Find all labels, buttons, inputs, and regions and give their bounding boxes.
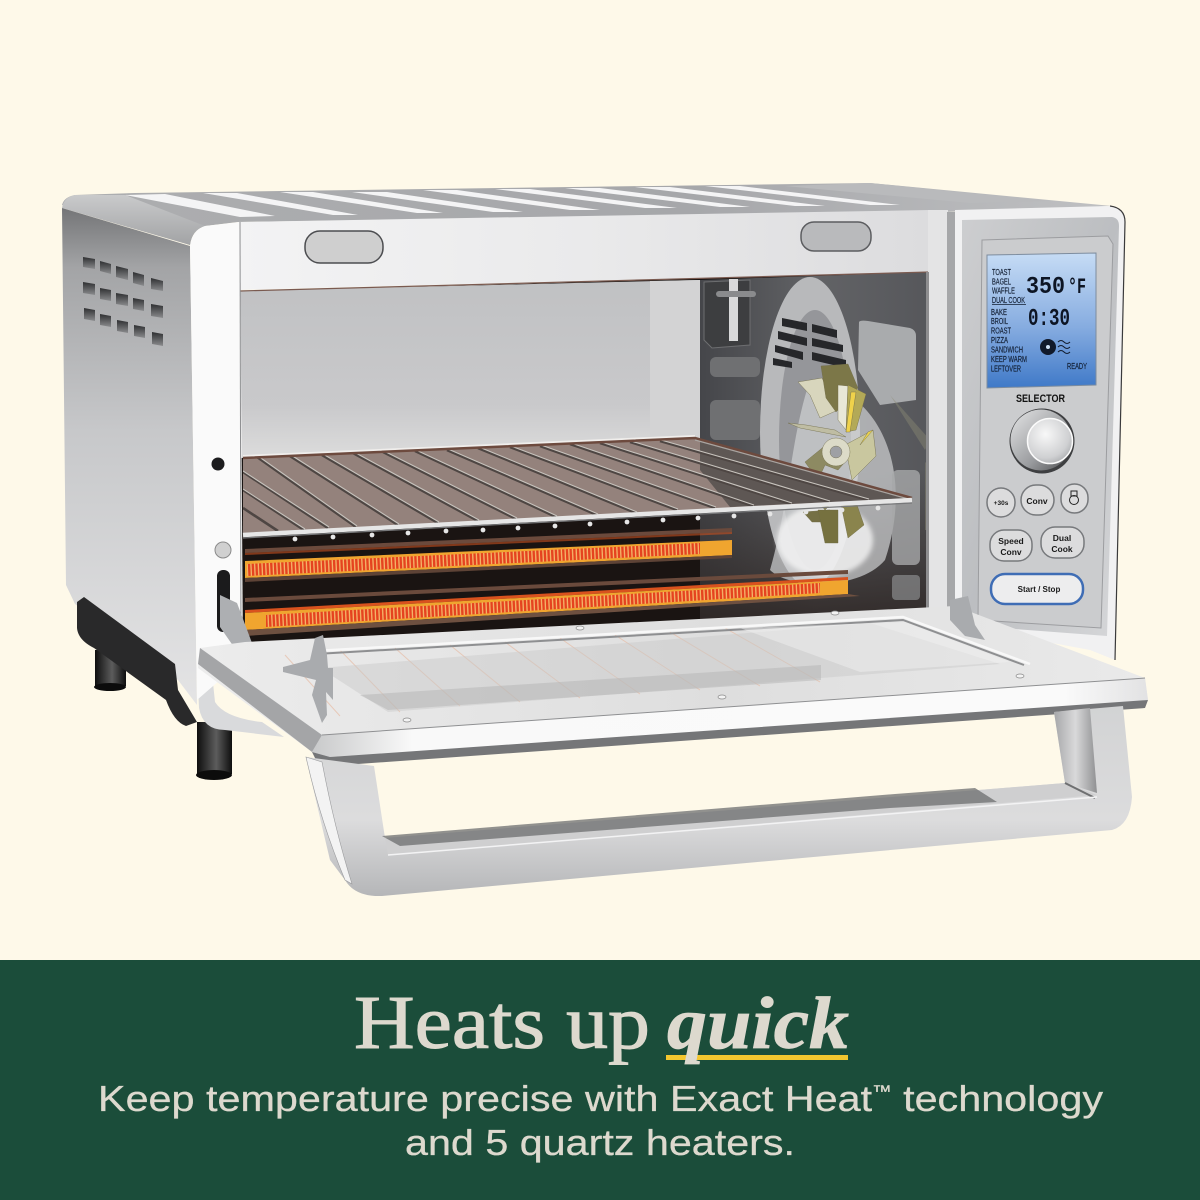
left side wall [62, 208, 197, 705]
upper quartz heater [245, 528, 732, 582]
bulb icon [1070, 491, 1078, 504]
right wall [700, 272, 930, 622]
shoulder of left side [62, 195, 205, 245]
lower base bracket [198, 683, 284, 737]
right strut inner face [1054, 708, 1097, 793]
LCD display: BROIL [991, 317, 1008, 326]
button labels: +30s [994, 500, 1009, 507]
LCD display [987, 253, 1096, 388]
LCD display: READY [1067, 362, 1087, 371]
door handle [306, 706, 1132, 896]
back wall [240, 280, 700, 458]
buttons [987, 484, 1088, 604]
LCD display: BAKE [991, 308, 1007, 317]
toaster oven [62, 183, 1148, 896]
heading: quick [667, 983, 849, 1065]
LCD display: °F [1068, 275, 1086, 300]
green caption band [0, 960, 1200, 1200]
front frame left post [190, 222, 252, 700]
lower quartz heater [245, 570, 860, 636]
door front edge [312, 678, 1148, 757]
subheading: and 5 quartz heaters. [405, 1122, 795, 1163]
front foot [196, 722, 232, 780]
background [0, 0, 1200, 960]
LCD display: ROAST [991, 326, 1011, 336]
subheading: ™ [872, 1082, 892, 1101]
LCD display: LEFTOVER [991, 364, 1021, 374]
yellow underline [666, 1055, 848, 1060]
ghost fan reflection [890, 362, 972, 530]
convection fan housing [760, 277, 920, 600]
selector knob [1010, 408, 1074, 474]
oven top [62, 183, 1112, 245]
LCD display: DUAL COOK [992, 296, 1025, 305]
selector label: SELECTOR [1016, 393, 1065, 405]
LCD display: SANDWICH [991, 346, 1023, 354]
rear foot [94, 650, 126, 691]
subheading: technology [892, 1078, 1103, 1119]
LCD display: BAGEL [992, 278, 1011, 286]
subheading: Keep temperature precise with Exact Heat [98, 1078, 772, 1119]
button labels: Conv [1000, 547, 1022, 557]
fan blades [788, 364, 876, 543]
LCD display: 350 [1026, 274, 1065, 301]
side vents [83, 257, 163, 346]
LCD display: TOAST [992, 268, 1011, 277]
LCD display: PIZZA [991, 336, 1008, 345]
open door [198, 596, 1148, 766]
door hinges [283, 596, 985, 723]
door glass [320, 623, 1000, 712]
fan symbol [1040, 339, 1070, 355]
LCD display: KEEP WARM [991, 355, 1027, 364]
button labels: Start / Stop [1018, 585, 1060, 594]
button labels: Conv [1026, 496, 1048, 506]
LCD display: WAFFLE [992, 286, 1015, 296]
front frame top band [238, 210, 930, 291]
right door frame post [926, 210, 957, 622]
black base rail [77, 597, 197, 726]
heading [354, 981, 849, 1065]
button labels [994, 496, 1073, 594]
handle recess [385, 783, 1097, 855]
LCD display: 0:30 [1028, 306, 1070, 333]
subheading [98, 1078, 1103, 1163]
control panel [955, 206, 1125, 660]
heading: Heats up [354, 981, 650, 1065]
wire rack [243, 436, 912, 541]
oven cavity [240, 272, 930, 650]
button labels: Speed [998, 536, 1024, 546]
door reflections [285, 628, 820, 716]
button labels: Cook [1051, 544, 1073, 554]
button labels: Dual [1053, 533, 1071, 543]
door screws [403, 611, 1024, 722]
